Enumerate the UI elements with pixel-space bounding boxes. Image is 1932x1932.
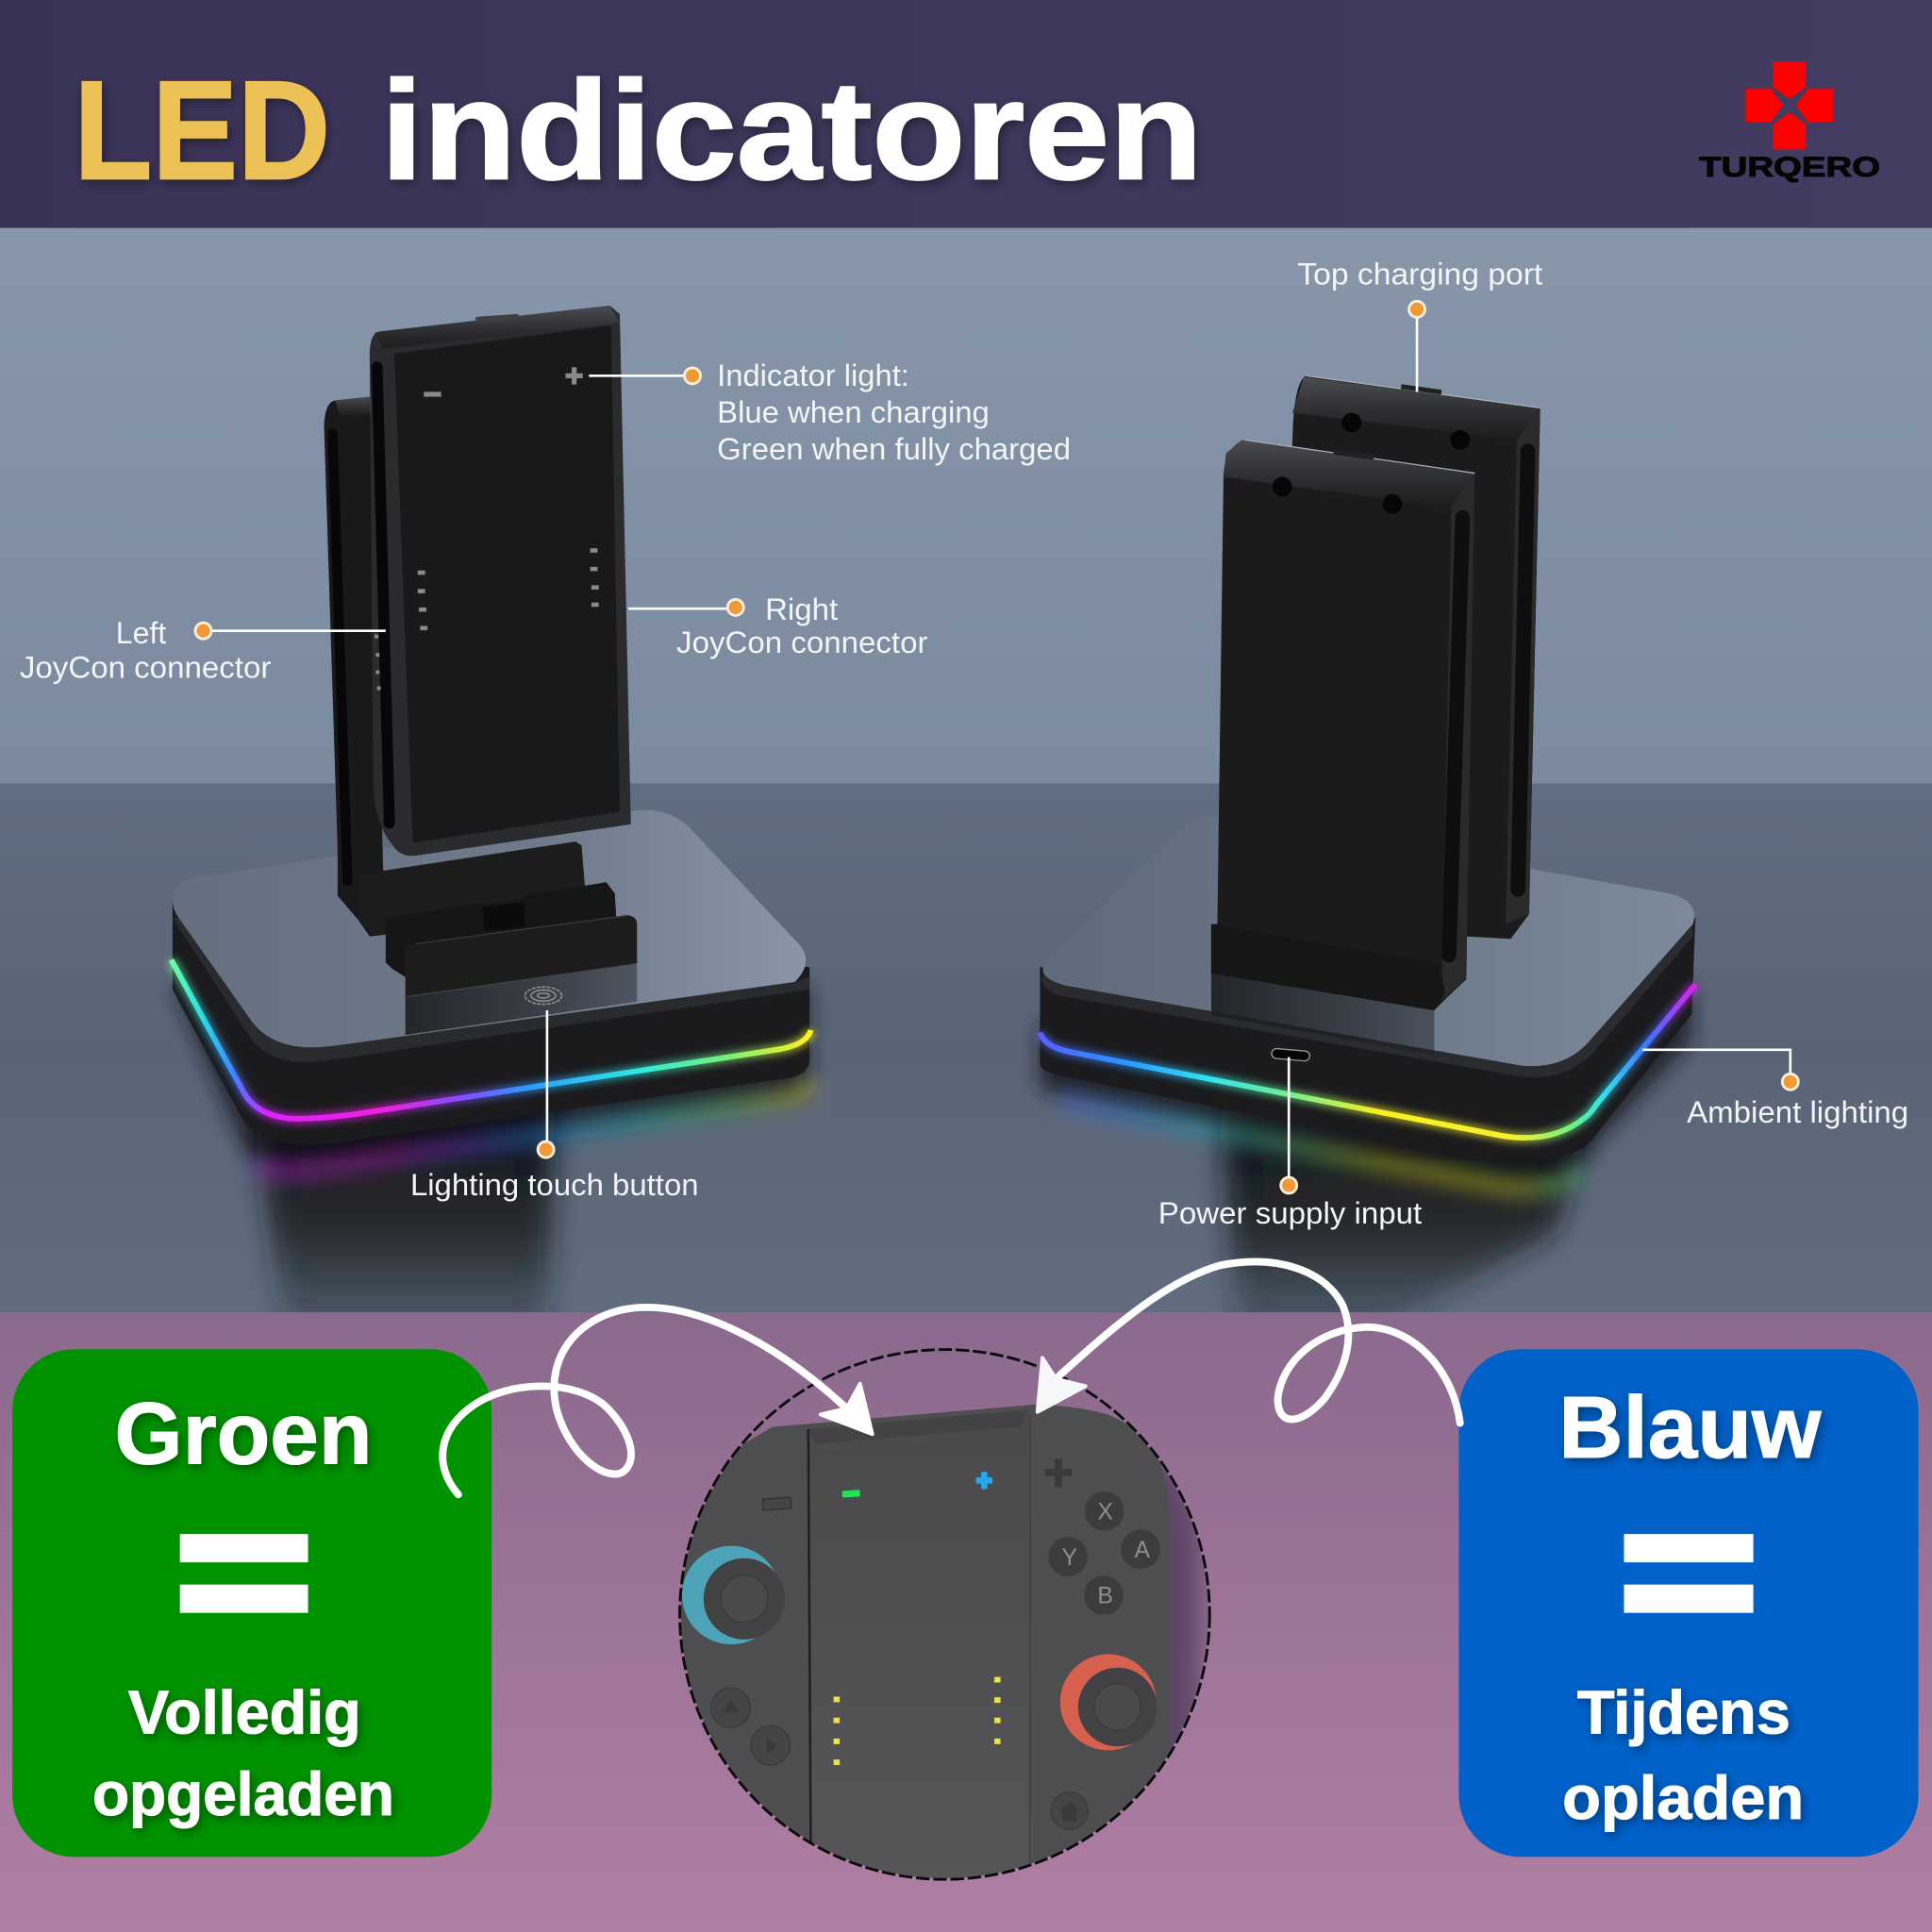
front holder — [1211, 440, 1474, 1010]
left charging dock — [172, 306, 810, 1144]
callout: top charging port: Top charging port — [1297, 257, 1542, 291]
reflection on base top — [406, 961, 637, 1035]
callout: indicator light: Green when fully charged — [717, 431, 1071, 466]
callout: indicator light: Indicator light: — [717, 358, 909, 392]
callout: left connector — [20, 615, 271, 684]
rear holder — [1288, 375, 1541, 939]
minus button — [762, 1497, 791, 1510]
front holder panel — [370, 306, 631, 856]
photo panel — [0, 228, 1932, 1312]
callout: indicator light — [717, 358, 1071, 466]
right charging dock — [1040, 375, 1695, 1164]
callout: right connector — [676, 591, 928, 659]
callout: indicator light: Blue when charging — [717, 394, 990, 429]
plus button — [1045, 1458, 1072, 1487]
controller detail circle: B — [1097, 1583, 1113, 1608]
reflection on base top — [1211, 971, 1434, 1055]
lower panel background — [0, 1312, 1932, 1932]
front holder cradles — [358, 841, 637, 997]
panel: blue — [1458, 1349, 1919, 1857]
panel: blue: Blauw — [1558, 1378, 1822, 1476]
yellow contacts — [834, 1677, 1001, 1765]
panel marks — [375, 367, 599, 690]
small buttons — [711, 1688, 1088, 1829]
controller detail circle — [665, 1405, 1201, 1897]
panel: green — [12, 1349, 491, 1857]
callout: ambient lighting: Ambient lighting — [1687, 1094, 1908, 1129]
face buttons — [1048, 1491, 1160, 1615]
callout: left connector: Left — [116, 615, 166, 650]
callout: left connector: JoyCon connector — [20, 649, 271, 684]
logo: Turqero: TURQERO — [1699, 152, 1880, 183]
controller detail circle: A — [1135, 1538, 1151, 1563]
controller body — [665, 1405, 1170, 1897]
logo: Turqero — [1699, 62, 1880, 183]
title — [74, 51, 1203, 208]
controller detail circle: Y — [1061, 1545, 1077, 1571]
arrow: blue to controller — [1038, 1262, 1460, 1424]
title: LED — [74, 51, 330, 208]
left stick — [682, 1546, 785, 1644]
rear joycon holder — [325, 397, 385, 921]
callout: power supply input: Power supply input — [1158, 1195, 1422, 1230]
LED green minus — [842, 1490, 860, 1498]
usb-c port — [1272, 1048, 1310, 1061]
right stick — [1060, 1654, 1157, 1750]
callout: lighting touch button: Lighting touch button — [410, 1167, 699, 1202]
arrow: green to controller — [442, 1307, 873, 1494]
controller detail circle: X — [1097, 1499, 1113, 1524]
table reflections — [173, 986, 1691, 1337]
LED blue plus — [975, 1472, 992, 1489]
callout dots — [195, 301, 1798, 1193]
panel: green: Groen — [114, 1385, 372, 1483]
panel: green: Volledig — [128, 1678, 361, 1747]
dashed circle outline — [680, 1350, 1209, 1879]
panel: green: opgeladen — [92, 1759, 394, 1828]
callouts — [209, 317, 1790, 1178]
title: indicatoren — [381, 51, 1203, 208]
fingerprint touch button — [525, 987, 562, 1004]
callout: right connector: JoyCon connector — [676, 625, 928, 659]
panel: blue: Tijdens — [1577, 1678, 1790, 1747]
header band — [0, 0, 1932, 228]
callout: right connector: Right — [765, 591, 838, 626]
panel: blue: opladen — [1562, 1763, 1804, 1832]
